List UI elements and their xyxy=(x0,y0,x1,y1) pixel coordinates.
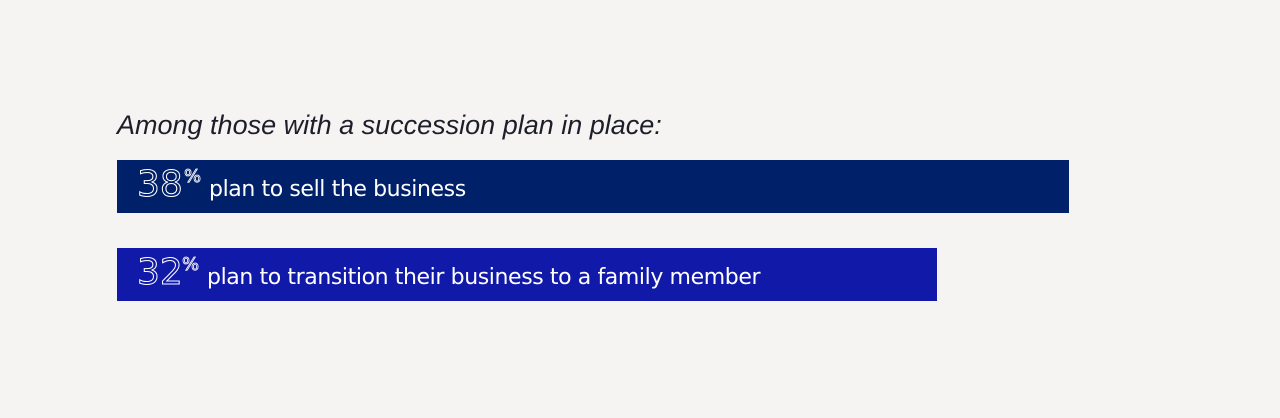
label family: plan to transition their business to a family member xyxy=(207,265,760,290)
heading: Among those with a succession plan in place: xyxy=(117,110,662,140)
label sell: plan to sell the business xyxy=(209,177,466,202)
bar: 38% sell xyxy=(117,160,1069,213)
bar: 32% family xyxy=(117,248,937,301)
